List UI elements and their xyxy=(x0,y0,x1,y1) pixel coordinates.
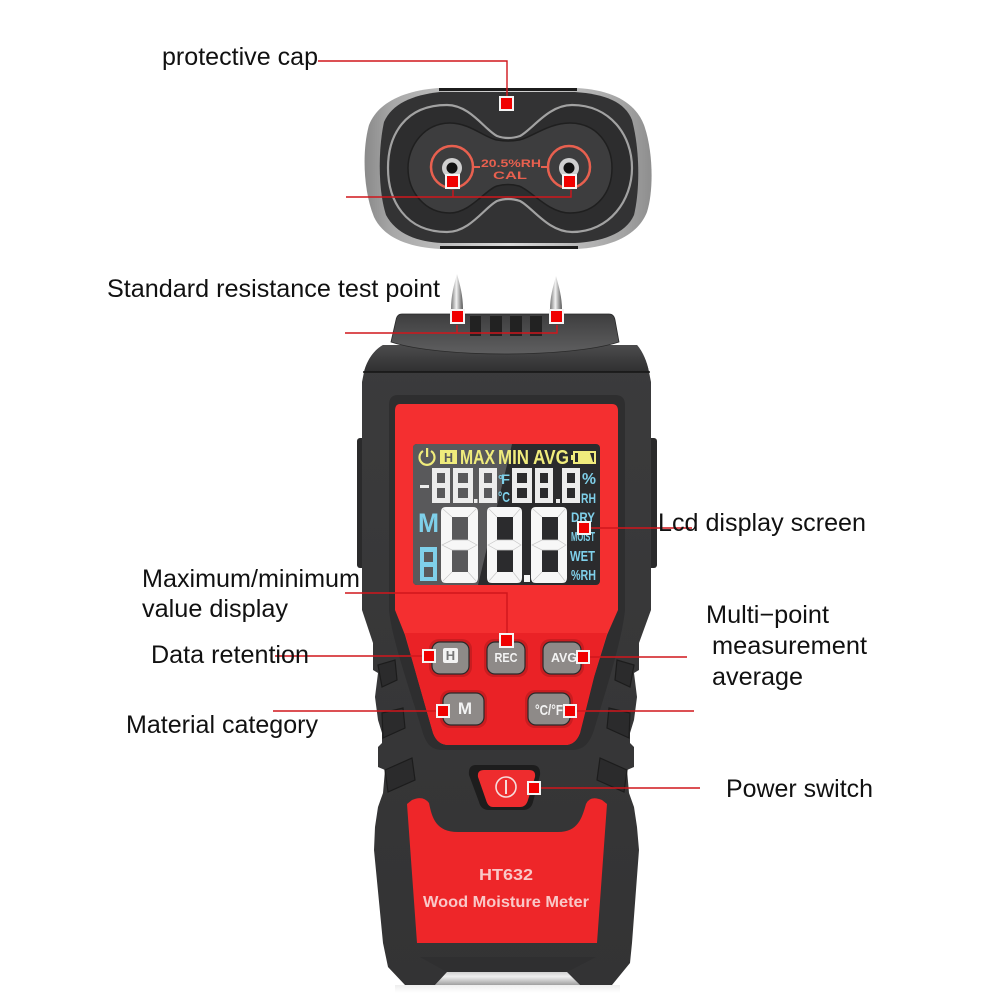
lcd display xyxy=(413,444,600,585)
lcd side labels: MOIST xyxy=(571,529,595,544)
model name: HT632 xyxy=(479,867,533,884)
button: material xyxy=(440,690,487,728)
lcd side labels: % xyxy=(582,471,596,488)
protective cap xyxy=(365,88,652,249)
lcd large readout xyxy=(441,507,567,583)
lcd side labels: RH xyxy=(581,490,596,506)
button: power xyxy=(469,765,540,810)
label: data retention: Data retention xyxy=(151,641,309,669)
button: material: M xyxy=(458,699,472,718)
floor shadow xyxy=(395,972,620,993)
label: multi-point measurement average: Multi−point xyxy=(706,601,829,629)
button: average xyxy=(540,639,584,677)
label: material category: Material category xyxy=(126,711,318,739)
red upper panel xyxy=(395,404,618,745)
label: lcd display screen: Lcd display screen xyxy=(658,509,866,537)
lcd side labels xyxy=(418,471,596,584)
meter body xyxy=(357,274,657,985)
lcd side labels: ° xyxy=(498,472,503,487)
button: record xyxy=(484,639,528,677)
lcd small readouts xyxy=(420,468,580,503)
lcd side labels: M xyxy=(418,508,439,538)
protective cap: CAL xyxy=(493,170,527,182)
label: multi-point measurement average: average xyxy=(712,663,803,691)
grip recesses xyxy=(378,660,634,792)
label: protective cap: protective cap xyxy=(162,43,318,71)
cap recess outline xyxy=(388,105,632,232)
calibration rings xyxy=(431,146,473,188)
label: multi-point measurement average xyxy=(706,601,867,691)
red lower panel xyxy=(407,798,607,943)
calibration label: 20.5%RH xyxy=(481,158,541,170)
lcd side labels: WET xyxy=(570,548,595,565)
lcd side labels: DRY xyxy=(571,509,596,525)
body shell xyxy=(362,345,651,985)
label: power switch: Power switch xyxy=(726,775,873,803)
label: maximum/minimum value display xyxy=(142,565,360,623)
bottom chamfer xyxy=(420,957,596,972)
lcd status row xyxy=(420,447,595,469)
button: average: AVG xyxy=(551,650,577,665)
lcd status row: MIN xyxy=(498,447,529,469)
label: maximum/minimum value display: value display xyxy=(142,595,289,623)
callout lines xyxy=(273,61,700,788)
lcd status row: MAX xyxy=(460,447,496,469)
segment seams xyxy=(442,509,566,581)
button: data hold xyxy=(429,639,472,677)
callout markers xyxy=(423,97,590,794)
lcd side labels: %RH xyxy=(571,567,596,584)
button: unit toggle xyxy=(525,690,573,728)
product name: Wood Moisture Meter xyxy=(423,894,589,911)
probe pins xyxy=(451,274,562,310)
label: maximum/minimum value display: Maximum/minimum xyxy=(142,565,360,593)
dark recess around the display panel xyxy=(389,395,625,750)
label: multi-point measurement average: measurement xyxy=(712,632,867,660)
label: standard resistance test point: Standard resistance test point xyxy=(107,275,440,303)
button: unit toggle: °C/°F xyxy=(535,702,563,719)
lcd status row: H xyxy=(444,451,453,465)
lcd side labels: F xyxy=(501,471,510,487)
side grips xyxy=(357,438,367,568)
button: data hold: H xyxy=(446,648,455,663)
lcd status row: AVG xyxy=(533,447,569,469)
lcd side labels: °C xyxy=(498,489,510,506)
button: record: REC xyxy=(494,650,518,665)
top collar xyxy=(391,314,619,354)
